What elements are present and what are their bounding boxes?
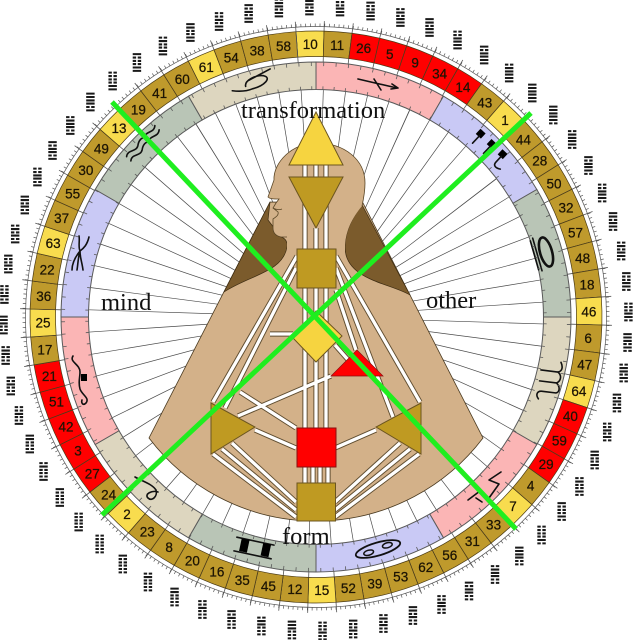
- gate 39: 39: [367, 577, 382, 592]
- gate 41: 41: [152, 86, 167, 101]
- gate 8: ䷇: [143, 568, 153, 593]
- gate 20: 20: [185, 553, 200, 568]
- gate 25: 25: [36, 316, 51, 331]
- gate 45: [245, 565, 285, 640]
- gate 3: ䷂: [38, 458, 49, 483]
- gate 45: ䷬: [256, 612, 267, 637]
- gate 31: ䷞: [490, 561, 500, 586]
- gate 46: 46: [581, 304, 596, 319]
- gate 58: [263, 0, 300, 66]
- gate 25: [0, 308, 62, 338]
- gate 44: ䷫: [548, 101, 559, 126]
- gate 54: ䷵: [214, 8, 224, 32]
- gate 57: ䷸: [608, 208, 618, 232]
- gate 50: ䷱: [583, 152, 594, 176]
- gate 5: ䷄: [395, 4, 406, 29]
- gate 39: ䷦: [378, 610, 389, 635]
- gate 26: 26: [356, 41, 371, 56]
- gate 34: ䷡: [452, 26, 463, 51]
- gate 59: 59: [552, 434, 567, 449]
- sector: lavender bottom, oval glyph: [304, 488, 444, 602]
- gate 7: [490, 483, 560, 552]
- gate 36: 36: [36, 289, 51, 304]
- gate 62: [405, 545, 460, 621]
- gate 61: ䷼: [185, 19, 196, 43]
- throat centre square: [297, 249, 336, 288]
- gate 18: 18: [580, 278, 595, 293]
- gate 2: ䷁: [95, 530, 105, 555]
- gate 30: ䷝: [47, 137, 58, 161]
- gate 61: [172, 13, 227, 89]
- heart centre triangle: [331, 350, 383, 376]
- gate 6: ䷅: [622, 329, 633, 354]
- gate 27: 27: [85, 466, 100, 481]
- sector: pink lower right, S glyph: [423, 416, 537, 555]
- gate 48: [562, 234, 632, 276]
- gate 26: [347, 0, 387, 69]
- gate 6: 6: [584, 331, 592, 346]
- gate 10: 10: [303, 37, 318, 52]
- sector: pink top right, arrow glyph: [316, 62, 444, 120]
- gate 55: [22, 158, 95, 214]
- gate 52: ䷳: [348, 615, 358, 640]
- gate 41: ䷨: [132, 49, 142, 73]
- label: transformation: transformation: [241, 97, 385, 124]
- gate 28: 28: [532, 154, 547, 169]
- gate 9: [395, 8, 448, 85]
- sector: beige right, m glyph: [513, 317, 571, 444]
- gate 33: 33: [486, 517, 501, 532]
- gate 34: [419, 20, 477, 96]
- gate 63: 63: [46, 236, 61, 251]
- gate 57: 57: [568, 225, 583, 240]
- gate 2: [81, 491, 150, 561]
- gate 49: [52, 105, 125, 171]
- gate 7: 7: [509, 499, 517, 514]
- gate 19: ䷒: [108, 67, 118, 92]
- gate 16: 16: [209, 564, 224, 579]
- gate 1: ䷀: [527, 79, 537, 104]
- gate 30: 30: [78, 163, 93, 178]
- gate 59: [537, 420, 610, 476]
- gate 29: 29: [539, 457, 554, 472]
- brown hair right: [345, 203, 410, 295]
- gate 33: ䷠: [514, 542, 524, 567]
- gate 18: [567, 265, 635, 301]
- gate 41: [118, 42, 182, 116]
- gate 43: ䷪: [504, 59, 514, 84]
- gate 20: ䷓: [169, 583, 180, 608]
- gate 44: [500, 95, 572, 162]
- gate 1: 1: [501, 113, 509, 128]
- gate 53: ䷴: [408, 602, 418, 627]
- gate 11: 11: [330, 38, 344, 53]
- gate 23: ䷖: [118, 550, 128, 575]
- gate 49: ䷰: [65, 112, 76, 136]
- gate 43: 43: [477, 95, 492, 110]
- gate 29: ䷜: [574, 473, 585, 498]
- gate 44: 44: [516, 132, 531, 147]
- sector: beige top left, spiral glyph: [188, 32, 328, 146]
- gate 21: [0, 358, 70, 400]
- gate 56: 56: [442, 548, 457, 563]
- gate 31: 31: [465, 534, 480, 549]
- gate 17: 17: [37, 342, 52, 357]
- gate 16: ䷏: [197, 596, 208, 621]
- gate 52: [332, 568, 369, 640]
- gate 13: ䷌: [85, 88, 96, 113]
- gate 31: [450, 518, 514, 592]
- gate 7: ䷆: [536, 521, 547, 546]
- gate 8: [128, 524, 191, 599]
- gate 40: ䷧: [602, 418, 612, 443]
- gate 47: ䷮: [619, 359, 629, 384]
- gate 20: [155, 538, 213, 614]
- gate 63: [3, 216, 75, 262]
- gate 2: 2: [123, 507, 131, 522]
- zodiac ring: [31, 32, 601, 602]
- gate 40: 40: [563, 409, 578, 424]
- gate 22: ䷕: [3, 250, 13, 275]
- gate 30: [36, 131, 109, 192]
- gate 56: ䷷: [464, 577, 474, 602]
- gate 19: 19: [131, 103, 146, 118]
- gate 23: [103, 508, 170, 582]
- label: mind: mind: [101, 289, 151, 316]
- green X lines: [102, 102, 531, 529]
- sector: beige lower left, curl glyph: [78, 424, 218, 538]
- label: form: form: [282, 523, 330, 550]
- gate 60: ䷻: [158, 32, 168, 57]
- gate 51: [6, 382, 78, 430]
- label: other: other: [426, 287, 476, 314]
- gate 24: [60, 472, 132, 539]
- gate 29: [523, 442, 596, 503]
- gate 8: 8: [165, 540, 173, 555]
- gate 4: [507, 463, 580, 529]
- gate 28: ䷛: [567, 126, 577, 150]
- gate 64: [557, 372, 629, 418]
- gate 50: [531, 147, 605, 205]
- gate 21: ䷔: [6, 372, 16, 397]
- zodiac ring tick marks: [56, 57, 576, 577]
- radial lines from body to zodiac ring: [172, 173, 460, 461]
- gate 22: [0, 247, 68, 286]
- gate 63: ䷾: [10, 220, 20, 245]
- sector: lavender upper right, block glyph: [414, 96, 554, 210]
- body silhouette: [149, 202, 483, 521]
- gate 46: ䷭: [623, 298, 634, 323]
- gate 9: 9: [411, 56, 419, 71]
- gate 3: 3: [74, 444, 82, 459]
- gate 16: [184, 549, 237, 626]
- gate 21: 21: [42, 369, 57, 384]
- gate 62: ䷽: [436, 591, 447, 616]
- gate 36: [0, 278, 63, 311]
- gate 19: [94, 61, 161, 133]
- gate 45: 45: [261, 579, 276, 594]
- gate 38: 38: [250, 43, 265, 58]
- gate 14: ䷍: [479, 41, 489, 66]
- gate 39: [357, 563, 400, 638]
- gate 13: [72, 82, 142, 151]
- gate 14: 14: [455, 80, 471, 95]
- gate 37: 37: [54, 211, 69, 226]
- channels outline: [213, 165, 420, 517]
- gate 32: [544, 175, 617, 228]
- gate 1: [482, 73, 551, 143]
- gate 49: 49: [94, 141, 109, 156]
- gate 51: ䷲: [14, 402, 24, 426]
- gate 53: [381, 555, 430, 631]
- gate 51: 51: [49, 395, 64, 410]
- gate 64: ䷿: [612, 389, 622, 414]
- gate 18: ䷑: [621, 268, 631, 292]
- gate 52: 52: [341, 581, 356, 596]
- gate 62: 62: [418, 560, 433, 575]
- gate 64: 64: [571, 384, 587, 399]
- gate 55: 55: [65, 186, 80, 201]
- root centre square: [297, 483, 336, 521]
- gate 27: ䷚: [55, 484, 65, 508]
- sacral centre square: [297, 428, 336, 467]
- gate 5: 5: [386, 47, 394, 62]
- channels white: [213, 165, 420, 517]
- gate 35: [214, 558, 261, 635]
- gate 5: [371, 0, 418, 76]
- brown hair left: [224, 202, 287, 292]
- gate 33: [471, 501, 538, 574]
- gate 54: [202, 3, 251, 79]
- sector: grey-green upper left, wave glyph: [95, 79, 209, 219]
- gate 50: 50: [547, 176, 562, 191]
- gate 60: 60: [175, 72, 190, 87]
- gate 60: [144, 26, 204, 102]
- gate 24: 24: [101, 488, 117, 503]
- gate 23: 23: [140, 525, 155, 540]
- gate 48: ䷯: [616, 237, 626, 262]
- gate 37: [11, 187, 84, 238]
- gate 48: 48: [575, 251, 590, 266]
- gate 58: 58: [276, 39, 291, 54]
- gate 43: [462, 53, 529, 126]
- gate 38: [232, 0, 275, 71]
- gate 15: [307, 571, 337, 640]
- gate 27: [42, 451, 115, 514]
- gate 17: [0, 333, 65, 369]
- sector: pink left, hook glyph: [31, 305, 145, 444]
- gate 46: [570, 296, 634, 326]
- gate 12: [276, 570, 310, 640]
- gate 9: ䷈: [424, 14, 435, 38]
- sector: lavender left, fork glyph: [61, 190, 119, 317]
- gate 17: ䷐: [1, 342, 11, 367]
- gate 37: ䷤: [20, 191, 30, 216]
- gate 61: 61: [199, 60, 214, 75]
- ajna centre triangle: [289, 177, 343, 228]
- gate 56: [428, 532, 488, 608]
- gate 47: [564, 348, 633, 387]
- gate 4: ䷃: [556, 498, 567, 523]
- head: [268, 143, 365, 262]
- gate 38: ䷥: [243, 0, 254, 24]
- gate 40: [548, 396, 621, 447]
- gate 10: [295, 0, 325, 63]
- spleen centre triangle: [211, 403, 255, 454]
- gate 34: 34: [432, 67, 448, 82]
- gate 59: ䷺: [589, 446, 600, 471]
- gate 6: [569, 323, 635, 356]
- gate 24: ䷗: [73, 508, 84, 533]
- gate 55: ䷶: [32, 163, 43, 188]
- gate 42: [15, 406, 88, 459]
- gate 22: 22: [40, 262, 55, 277]
- gate 32: ䷟: [597, 179, 607, 204]
- head centre triangle: [289, 112, 343, 165]
- gate 13: 13: [111, 121, 126, 136]
- gate 14: [441, 35, 503, 110]
- sector: grey-green right, ring glyph: [487, 190, 601, 329]
- gate 35: ䷢: [226, 606, 237, 630]
- gate 11: [322, 0, 356, 64]
- body graph: [149, 112, 483, 521]
- sector: grey-green bottom, bars glyph: [188, 514, 316, 572]
- solar plexus centre triangle: [376, 403, 421, 454]
- gate 53: 53: [393, 570, 408, 585]
- gate 42: 42: [59, 420, 74, 435]
- gate 32: 32: [558, 200, 573, 215]
- G centre diamond: [293, 311, 342, 362]
- gate 57: [554, 204, 626, 252]
- gate 35: 35: [235, 573, 250, 588]
- gate 28: [517, 120, 590, 183]
- gate 12: 12: [287, 582, 302, 597]
- gate 3: [27, 429, 101, 487]
- gate 4: 4: [527, 479, 535, 494]
- gate 15: 15: [314, 583, 329, 598]
- gate 47: 47: [577, 358, 592, 373]
- gate 42: ䷩: [25, 430, 35, 455]
- gate 54: 54: [224, 50, 239, 65]
